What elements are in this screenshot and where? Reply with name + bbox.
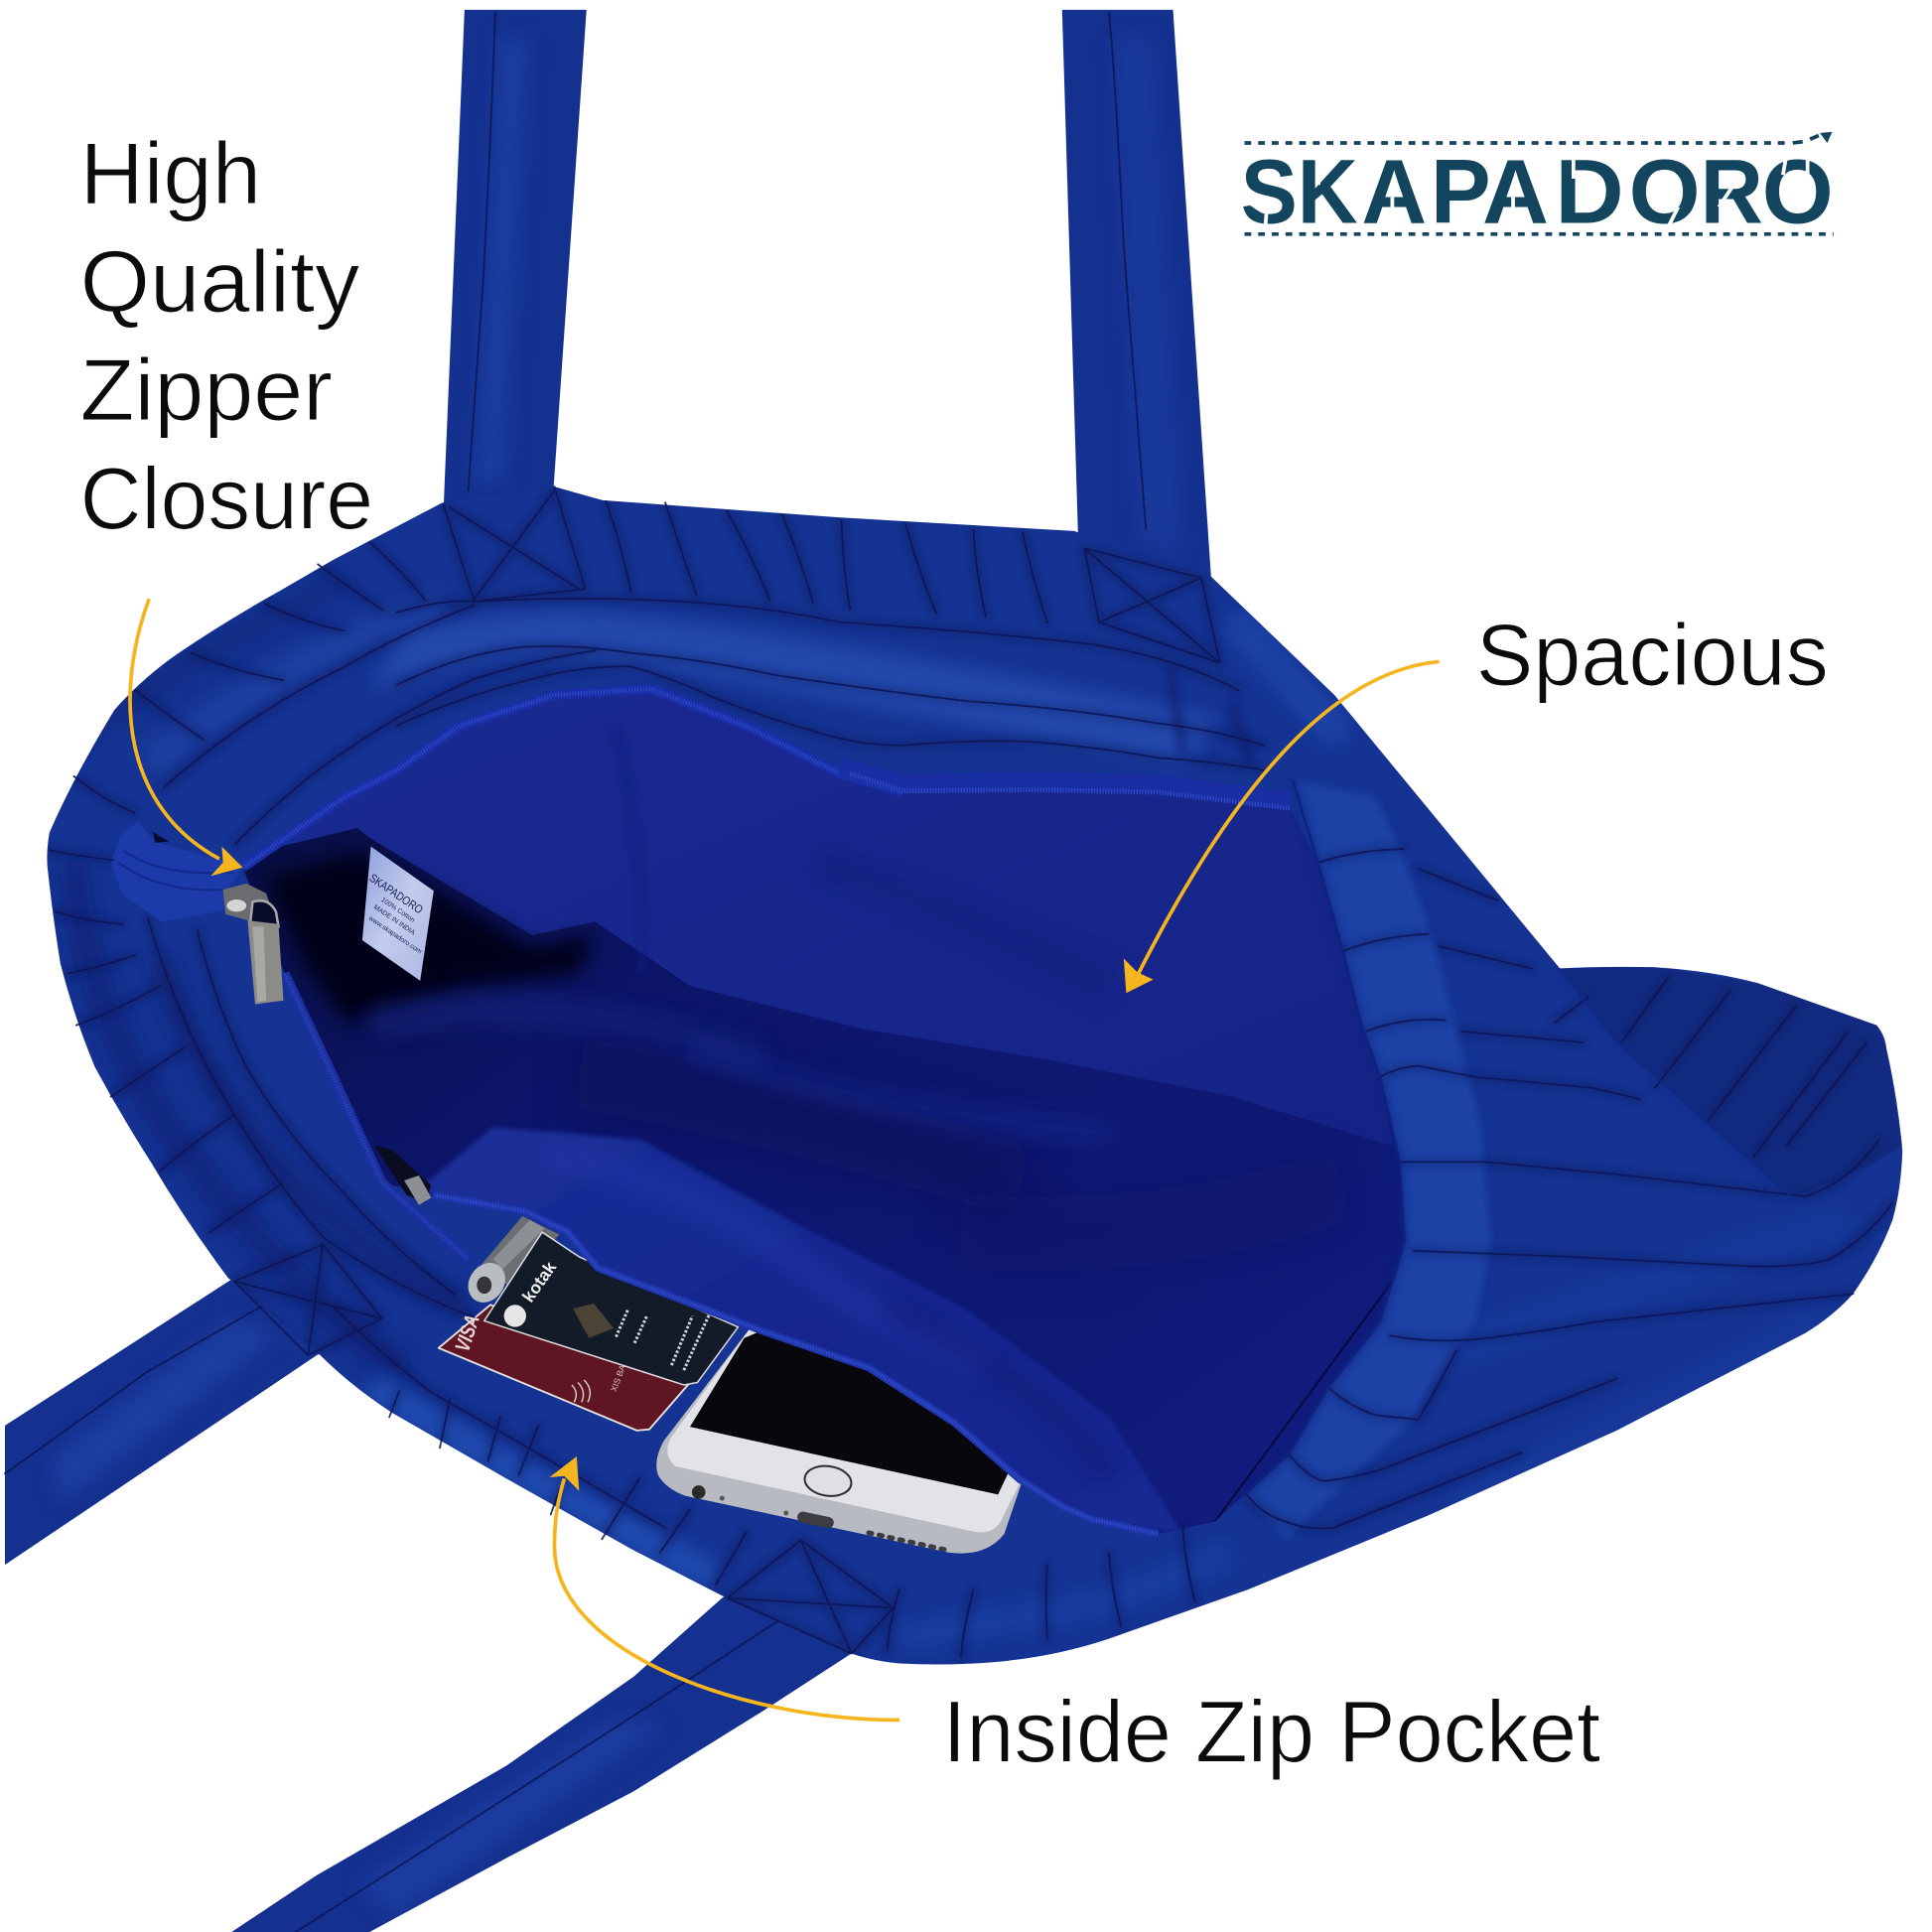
red credit card <box>439 1305 690 1431</box>
logo: wordmark: O <box>1762 142 1834 243</box>
arrow: spacious <box>1124 661 1440 993</box>
logo: wordmark: K <box>1298 142 1358 243</box>
pen in pocket <box>461 1216 559 1310</box>
interior: back wall <box>265 671 1392 1146</box>
callout: High Quality Zipper Closure: Closure <box>80 449 373 547</box>
callout: Spacious: Spacious <box>1476 606 1829 704</box>
bag handle: front left strap <box>4 1280 320 1565</box>
phone: black screen <box>690 1330 1008 1494</box>
callout: High Quality Zipper Closure: Zipper <box>80 341 333 439</box>
arrow: zipper closure <box>130 599 242 876</box>
logo: wordmark <box>1241 142 1834 243</box>
bag interior <box>242 671 1405 1534</box>
woven brand label: SKAPADORO <box>366 872 425 916</box>
zipper slider and pull <box>223 884 283 1004</box>
stitching: right flap <box>1246 849 1892 1528</box>
phone: home button <box>803 1463 853 1499</box>
black credit card: kotak <box>518 1257 560 1306</box>
bag handle: front right strap <box>231 1596 852 1932</box>
fabric: flap light band <box>1246 780 1491 1539</box>
logo: bottom stitched line <box>1244 232 1834 235</box>
interior: dark shadow <box>265 853 595 1023</box>
zipper end loop <box>112 823 242 920</box>
bag handle: back right <box>1062 10 1211 579</box>
fabric shading <box>73 579 1902 1639</box>
stitching: left rim <box>50 542 425 1232</box>
small inner zip slider <box>374 1146 431 1205</box>
interior: floor folds <box>579 1072 1023 1182</box>
callout: High Quality Zipper Closure <box>80 124 373 547</box>
stitching: bottom rim <box>333 1307 1195 1657</box>
woven brand label: www.skapadoro.com <box>366 914 423 956</box>
quilted stitching <box>50 486 1892 1657</box>
callout: High Quality Zipper Closure: Quality <box>80 232 359 331</box>
red credit card: VISA <box>451 1312 484 1354</box>
logo: wordmark: P <box>1431 142 1491 243</box>
arrow: inside zip pocket <box>550 1456 899 1721</box>
phone: silver edge <box>656 1329 1023 1554</box>
pocket zipper <box>434 1195 1159 1534</box>
stitching: handle base boxes <box>444 486 1220 663</box>
stitching: top rim <box>397 599 1264 770</box>
bag body <box>47 486 1902 1664</box>
black credit card <box>484 1232 738 1385</box>
woven brand label <box>362 847 434 981</box>
brand logo: SKAPADORO <box>1241 132 1834 243</box>
logo: wordmark: A <box>1482 142 1549 243</box>
logo: wordmark: R <box>1701 142 1763 243</box>
woven brand label: 100% Cotton <box>379 897 416 924</box>
main zipper <box>242 689 1290 1259</box>
interior: pocket panel <box>419 1128 1182 1534</box>
phone: ports <box>692 1485 946 1550</box>
woven brand label: MADE IN INDIA <box>372 904 416 937</box>
logo: wordmark: O <box>1629 142 1701 243</box>
logo: wordmark: S <box>1241 142 1298 243</box>
logo: stencil cuts <box>1247 150 1808 226</box>
logo: wordmark: A <box>1361 142 1427 243</box>
phone: white face <box>667 1329 1022 1532</box>
logo: top stitched line <box>1244 141 1787 144</box>
stitch shadows <box>50 486 1892 1657</box>
smartphone in pocket <box>656 1329 1023 1554</box>
callout: Inside Zip Pocket: Inside Zip Pocket <box>942 1683 1600 1781</box>
logo: wordmark: D <box>1555 142 1624 243</box>
red credit card: XIS BANK <box>609 1352 631 1393</box>
callout: High Quality Zipper Closure: High <box>80 124 261 222</box>
bag handle: back left <box>444 10 587 507</box>
logo: needle arrow <box>1793 132 1832 143</box>
